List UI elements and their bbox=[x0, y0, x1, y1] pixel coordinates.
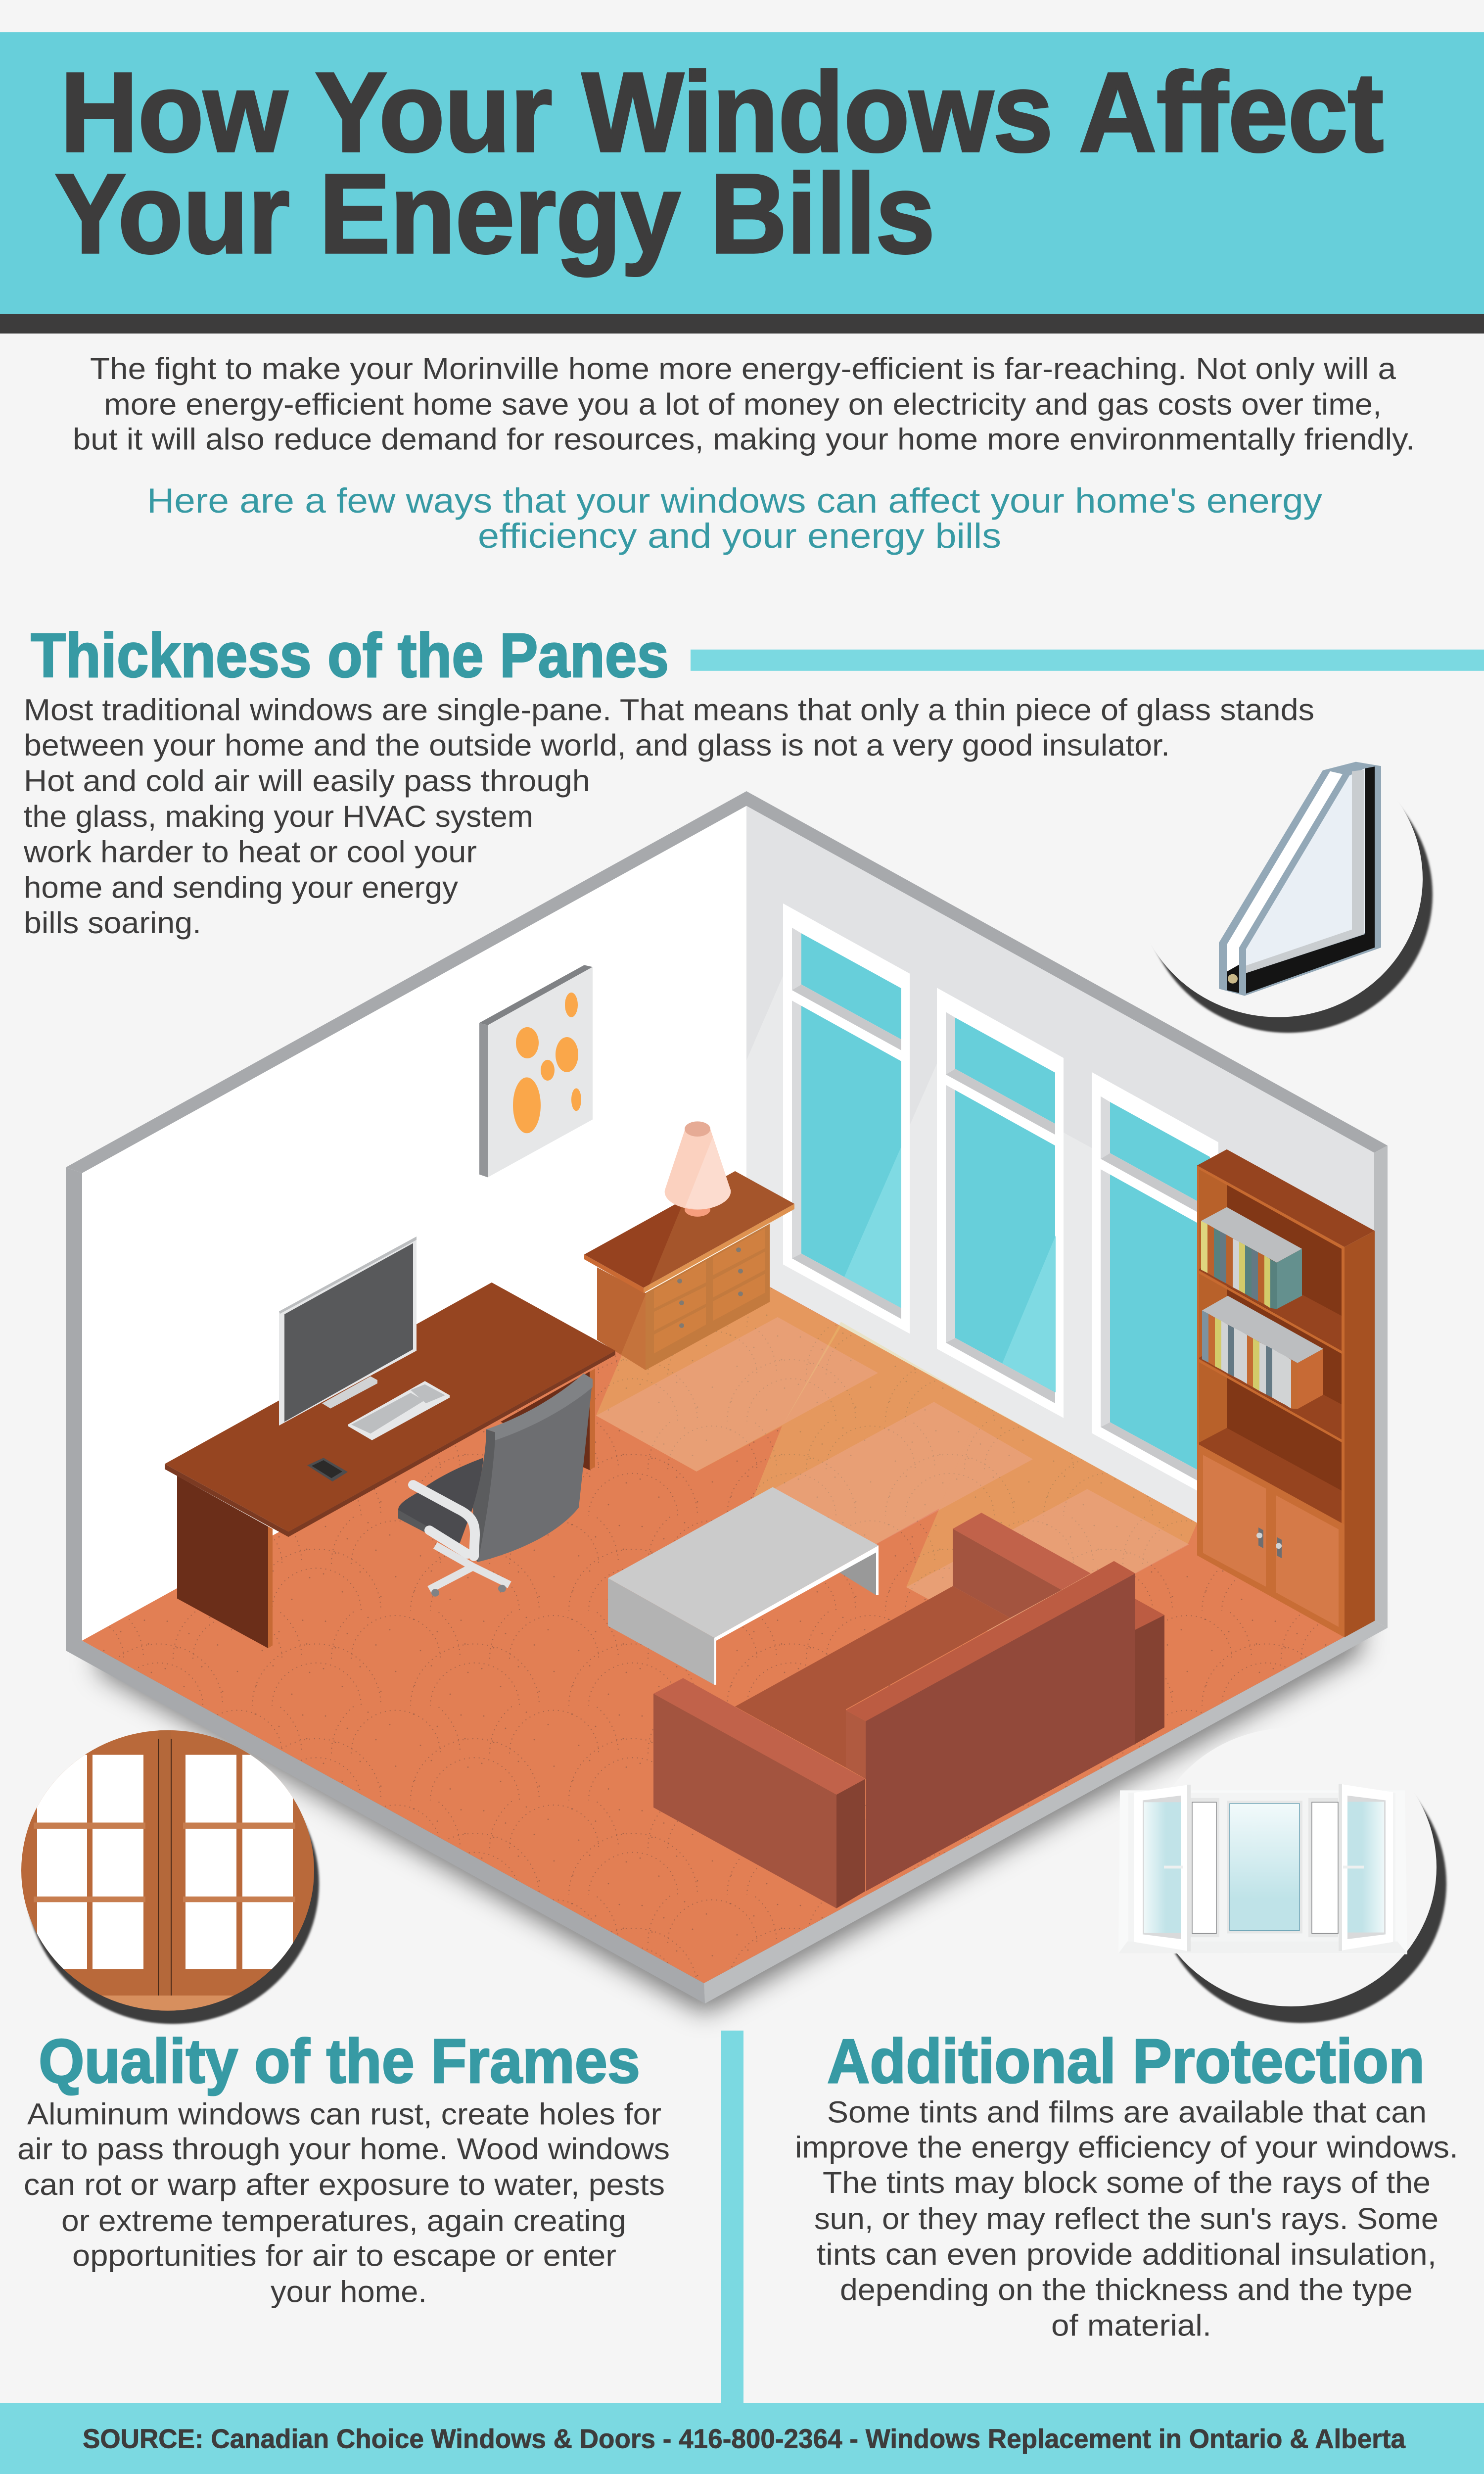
left wall bbox=[82, 806, 746, 1641]
coffee table bbox=[608, 1487, 879, 1685]
intro paragraph: The fight to make your Morinville home more energy-efficient is far-reaching. Not only will a bbox=[90, 352, 1396, 386]
intro paragraph bbox=[73, 352, 1415, 456]
intro paragraph: more energy-efficient home save you a lot of money on electricity and gas costs over time, bbox=[104, 387, 1382, 421]
frames body text: your home. bbox=[271, 2275, 427, 2309]
title bbox=[55, 49, 1384, 277]
right sash bbox=[1339, 1784, 1393, 1951]
thickness body text: Most traditional windows are single-pane. That means that only a thin piece of glass stands bbox=[24, 693, 1314, 727]
protection body text: tints can even provide additional insulation, bbox=[817, 2237, 1437, 2271]
footer source bar bbox=[0, 2403, 1484, 2474]
desk bbox=[165, 1237, 615, 1648]
protection body text: depending on the thickness and the type bbox=[840, 2273, 1413, 2307]
frames body text: can rot or warp after exposure to water, pests bbox=[24, 2168, 665, 2202]
icon: wood frame window bbox=[21, 1730, 314, 2011]
dresser cabinet bbox=[584, 1171, 794, 1370]
intro subheading bbox=[147, 481, 1323, 556]
frames body text: air to pass through your home. Wood windows bbox=[17, 2132, 670, 2166]
inset: open casement window bbox=[1118, 1728, 1446, 2023]
thickness body text: between your home and the outside world, and glass is not a very good insulator. bbox=[24, 728, 1170, 762]
books upper shelf bbox=[1201, 1207, 1302, 1309]
sofa bbox=[653, 1513, 1164, 1908]
frames body text: or extreme temperatures, again creating bbox=[61, 2204, 626, 2238]
phone bbox=[307, 1458, 348, 1481]
room shadow bbox=[99, 1601, 1360, 2013]
keyboard bbox=[348, 1381, 450, 1440]
icon: double pane glass bbox=[1219, 762, 1381, 996]
protection body text: sun, or they may reflect the sun's rays. Some bbox=[814, 2202, 1438, 2236]
intro paragraph: but it will also reduce demand for resources, making your home more environmentally friendly. bbox=[73, 423, 1415, 456]
wall outer band bbox=[66, 791, 1388, 2003]
frames body text: Aluminum windows can rust, create holes for bbox=[27, 2097, 661, 2131]
thickness body text: home and sending your energy bbox=[24, 871, 459, 904]
vertical divider bbox=[721, 2031, 743, 2403]
wall painting bbox=[479, 965, 593, 1177]
thickness body text: the glass, making your HVAC system bbox=[24, 800, 533, 834]
footer source bar: SOURCE: Canadian Choice Windows & Doors - 416-800-2364 - Windows Replacement in Ontario & Alberta bbox=[83, 2423, 1406, 2454]
thickness body text: bills soaring. bbox=[24, 906, 201, 940]
protection body text: The tints may block some of the rays of the bbox=[823, 2166, 1431, 2200]
protection body text: of material. bbox=[1051, 2309, 1211, 2342]
heading: additional protection: Additional Protection bbox=[827, 2027, 1425, 2096]
intro subheading: efficiency and your energy bills bbox=[478, 516, 1001, 556]
inset: glass pane cross-section bbox=[1134, 741, 1433, 1033]
window 1 bbox=[783, 904, 910, 1333]
intro subheading: Here are a few ways that your windows can affect your home's energy bbox=[147, 481, 1323, 521]
light on right wall bbox=[746, 933, 1197, 1523]
light beams on floor bbox=[596, 1274, 1197, 1643]
inset: wooden window bbox=[21, 1730, 321, 2026]
window 2 bbox=[937, 988, 1064, 1418]
isometric room illustration bbox=[66, 791, 1388, 2003]
thickness body text: Hot and cold air will easily pass through bbox=[24, 764, 590, 798]
right wall bbox=[746, 806, 1374, 1621]
protection body text: improve the energy efficiency of your windows. bbox=[795, 2131, 1458, 2164]
books lower shelf bbox=[1202, 1296, 1323, 1409]
cabinet doors bbox=[1197, 1443, 1345, 1637]
computer monitor bbox=[279, 1237, 417, 1426]
thickness body text: work harder to heat or cool your bbox=[23, 835, 477, 869]
header banner bbox=[0, 32, 1484, 333]
heading: thickness of the panes: Thickness of the Panes bbox=[31, 621, 669, 691]
title: Your Energy Bills bbox=[55, 151, 935, 277]
floor bbox=[82, 1274, 1374, 1983]
office chair bbox=[398, 1374, 593, 1597]
thickness body text bbox=[23, 693, 1314, 940]
bookcase bbox=[1197, 1149, 1375, 1637]
protection body text bbox=[795, 2095, 1458, 2342]
protection body text: Some tints and films are available that can bbox=[827, 2095, 1427, 2129]
window 3 bbox=[1092, 1072, 1218, 1502]
frames body text: opportunities for air to escape or enter bbox=[72, 2239, 616, 2273]
left sash bbox=[1134, 1785, 1191, 1951]
heading: quality of the frames: Quality of the Frames bbox=[39, 2027, 640, 2096]
icon: three-part window bbox=[1118, 1784, 1407, 1954]
frames body text bbox=[17, 2097, 670, 2309]
table lamp bbox=[665, 1121, 731, 1217]
heading accent bar bbox=[691, 650, 1484, 671]
title: How Your Windows Affect bbox=[60, 49, 1384, 175]
